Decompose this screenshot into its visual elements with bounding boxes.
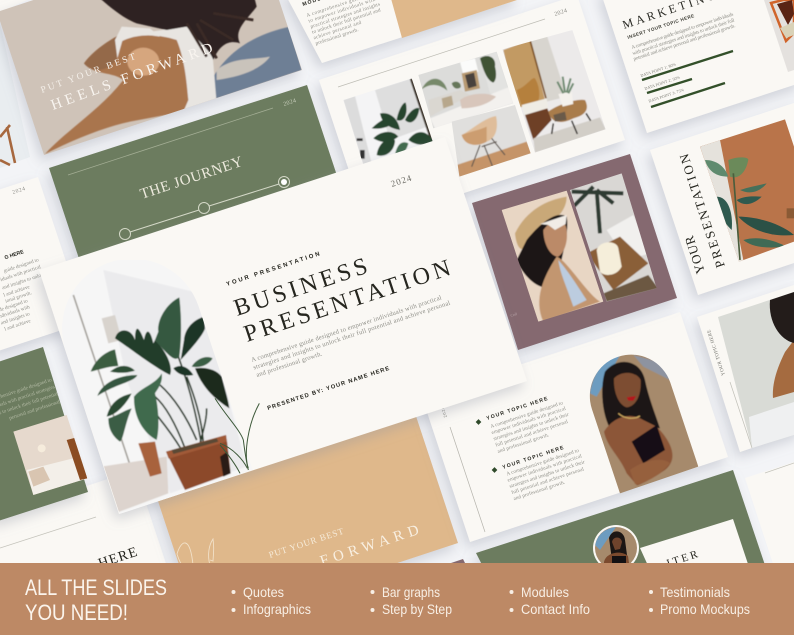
journey heading: THE JOURNEY (138, 154, 245, 203)
topic paragraph 1 (490, 400, 570, 455)
vertical title second line: PRESENTATION (676, 151, 728, 270)
bar labels (640, 61, 685, 103)
heels main heading: HEELS FORWARD (49, 40, 215, 114)
mauve caption: Cell (510, 311, 518, 318)
bar chart (642, 51, 733, 107)
timeline (120, 176, 290, 240)
collage year: 2024 (554, 8, 568, 18)
slide: module text top-centre (283, 0, 517, 63)
green slide paragraph (0, 377, 61, 422)
bottom band (0, 563, 794, 635)
slide: topics with woman portrait (422, 312, 728, 542)
left paragraph: guide designed to (3, 257, 40, 274)
arch portrait (587, 353, 703, 497)
topic paragraph 2 (506, 448, 586, 502)
left heading: G HERE (4, 249, 25, 261)
feature list: Promo Mockups (660, 601, 750, 617)
candle photo (570, 174, 656, 302)
main description: strategies and insights to unlock their full potential and achieve personal (252, 300, 451, 371)
module paragraph: to unlock their full potential and (311, 6, 382, 36)
slide: right lower woman back (697, 283, 794, 452)
title line 2: PRESENTATION (241, 255, 454, 348)
eyebrow: YOUR PRESENTATION (226, 251, 321, 288)
topic paragraph 2: strategies and insights to unlock their (509, 459, 586, 490)
topic paragraph 2: empower individuals with practical (507, 453, 583, 484)
feature list: Bar graphs (382, 584, 440, 600)
testimonial title: ITER (665, 548, 700, 570)
slide: the journey (49, 85, 355, 313)
module paragraph: practical strategies and insights (310, 1, 381, 30)
band headline: YOU NEED! (25, 600, 128, 625)
slide: marketing bars (600, 0, 794, 133)
feature list: Quotes (243, 584, 284, 600)
heels small heading: PUT YOUR BEST (40, 52, 137, 96)
topic paragraph 1: strategies and insights to unlock their (493, 412, 570, 442)
left paragraph: ional growth. (4, 290, 33, 305)
diamond bullet 1 (476, 419, 481, 425)
topic heading 1: YOUR TOPIC HERE (486, 396, 549, 422)
topic paragraph 2: full potential and achieve personal (510, 465, 585, 496)
module paragraph: achieve personal and (313, 20, 362, 41)
slide: chair photo top-left (0, 0, 30, 168)
bar labels: DATA POINT 3: 75% (648, 87, 685, 103)
diamond bullet 2 (492, 467, 497, 473)
slide: left text (0, 177, 86, 352)
left paragraph: and insights to unlock (1, 271, 47, 291)
presenter: PRESENTED BY: YOUR NAME HERE (267, 366, 390, 412)
left year: 2024 (12, 186, 26, 196)
journey year: 2024 (283, 98, 297, 108)
left paragraph: l and achieve (4, 318, 32, 332)
topic paragraph 1: and professional growth. (496, 431, 550, 455)
topic paragraph 2: and professional growth. (512, 479, 566, 502)
line leaf drawing (177, 539, 214, 572)
bottom-left title: HERE (97, 545, 139, 572)
tan main heading: FORWARD (318, 522, 421, 570)
vertical topic label: YOUR TOPIC HERE (707, 329, 727, 376)
slide: bottom-right green testimonial (472, 470, 764, 563)
feature list: Contact Info (521, 601, 590, 617)
topic heading 2: YOUR TOPIC HERE (502, 445, 565, 471)
main year: 2024 (389, 173, 413, 189)
slide: collage with room photos (314, 8, 624, 201)
marketing paragraph: potential and achieve personal and professional growth. (632, 22, 736, 62)
band headline (25, 575, 167, 625)
topic year: 2024 (440, 406, 448, 418)
slide: main business presentation (39, 137, 527, 514)
slide: green with bedroom (0, 347, 93, 522)
bar labels: DATA POINT 1: 80% (640, 61, 677, 78)
orange plant photo (700, 120, 794, 262)
left paragraph (0, 257, 47, 332)
avatar (593, 525, 639, 563)
band headline: ALL THE SLIDES (25, 575, 167, 600)
slide: bottom-right corner (745, 462, 794, 570)
slide: tan heels forward (152, 398, 458, 628)
left paragraph: and insights to (0, 311, 31, 326)
topic paragraph 1: empower individuals with practical (491, 406, 567, 436)
woman photo (718, 292, 794, 448)
shelf photo (764, 0, 794, 72)
woman photo (45, 0, 302, 154)
feature list: Modules (521, 584, 569, 600)
slide: your presentation vertical (650, 101, 794, 295)
title line 1: BUSINESS (231, 253, 371, 322)
topic paragraph 2: A comprehensive guide designed to (506, 448, 580, 477)
small mauve patch (451, 559, 465, 563)
bar labels: DATA POINT 2: 50% (644, 74, 681, 91)
topic paragraph 1: full potential and achieve personal (494, 418, 569, 448)
slide: heels photo (0, 0, 302, 155)
tan block (390, 0, 517, 38)
module paragraph (306, 0, 382, 47)
green slide paragraph: personal and professional (8, 398, 61, 422)
outline leaf drawing (215, 398, 259, 473)
main description: A comprehensive guide designed to empower individuals with practical (250, 294, 443, 364)
slide: bottom-left heading (0, 470, 178, 600)
slide: mauve with two photos (472, 154, 677, 350)
marketing paragraph: A comprehensive guide designed to empower individuals (631, 12, 734, 51)
bedroom photo (14, 415, 88, 495)
vertical title first line: YOUR (681, 234, 708, 276)
photo grid (340, 30, 607, 178)
feature list: Infographics (243, 601, 311, 617)
feature list: Step by Step (382, 601, 452, 617)
marketing paragraph: with practical strategies and insights to unlock their full (631, 16, 736, 57)
tan small heading: PUT YOUR BEST (267, 526, 345, 560)
arch plant photo (72, 270, 246, 513)
main description: and professional growth. (255, 350, 323, 379)
topic paragraph 1: A comprehensive guide designed to (490, 400, 564, 430)
hat woman photo (502, 190, 604, 322)
module paragraph: professional growth. (314, 26, 359, 47)
left paragraph: l and achieve (3, 284, 31, 298)
feature list (232, 584, 750, 617)
marketing subtitle: INSERT YOUR TOPIC HERE (627, 13, 695, 40)
feature list: Testimonials (660, 584, 730, 600)
